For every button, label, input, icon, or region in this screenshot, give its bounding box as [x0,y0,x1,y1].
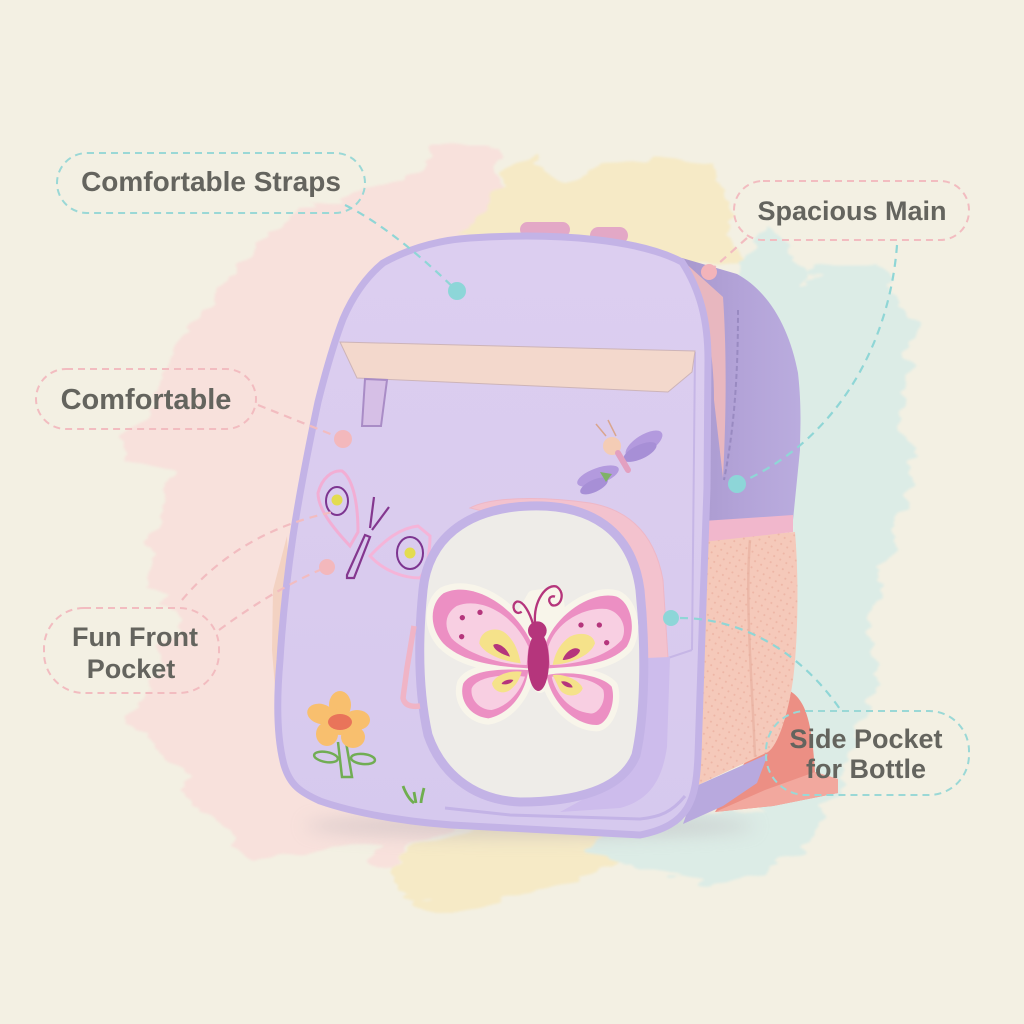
side seam stitching [724,310,738,480]
callout: spacious main [701,181,969,493]
small lower pocket [560,657,670,812]
zip clip [403,626,420,706]
side bottom [683,754,768,824]
label: comfortable: Comfortable [61,384,231,416]
shadow [305,815,755,837]
front seam [668,352,695,658]
wings [433,590,632,725]
label: fun front pocket: Fun Front [72,622,198,652]
antennae [514,586,562,625]
mesh elastic [703,515,793,542]
left side sliver [272,536,295,750]
label: side pocket for bottle: Side Pocket [789,724,943,754]
callout: fun front pocket: Pocket [87,654,175,684]
paint strokes background [125,145,915,912]
front pocket [420,506,644,802]
callout: fun front pocket [44,512,335,693]
callout: comfortable straps [57,153,466,300]
backpack [272,222,838,837]
label: comfortable straps: Comfortable Straps [81,166,341,197]
butterfly patch [433,586,632,725]
side mesh pocket [696,532,797,786]
flower doodle [305,691,424,803]
mesh fold [748,540,755,757]
callout: side pocket for bottle: for Bottle [806,754,926,784]
left butterfly doodle [318,471,430,578]
rear strap [715,691,838,812]
side panel [682,258,800,525]
callout: comfortable [36,369,352,448]
top handles [520,222,570,237]
body [278,236,708,835]
bottom seam [445,796,685,819]
callout: side pocket for bottle [663,610,969,795]
dragonfly doodle [575,420,667,498]
zip pull [362,379,387,426]
side zip [682,260,726,478]
zipper flap [340,342,695,392]
patch backing [433,590,632,725]
label: spacious main: Spacious Main [757,196,947,226]
front pocket zipper band [470,499,668,660]
